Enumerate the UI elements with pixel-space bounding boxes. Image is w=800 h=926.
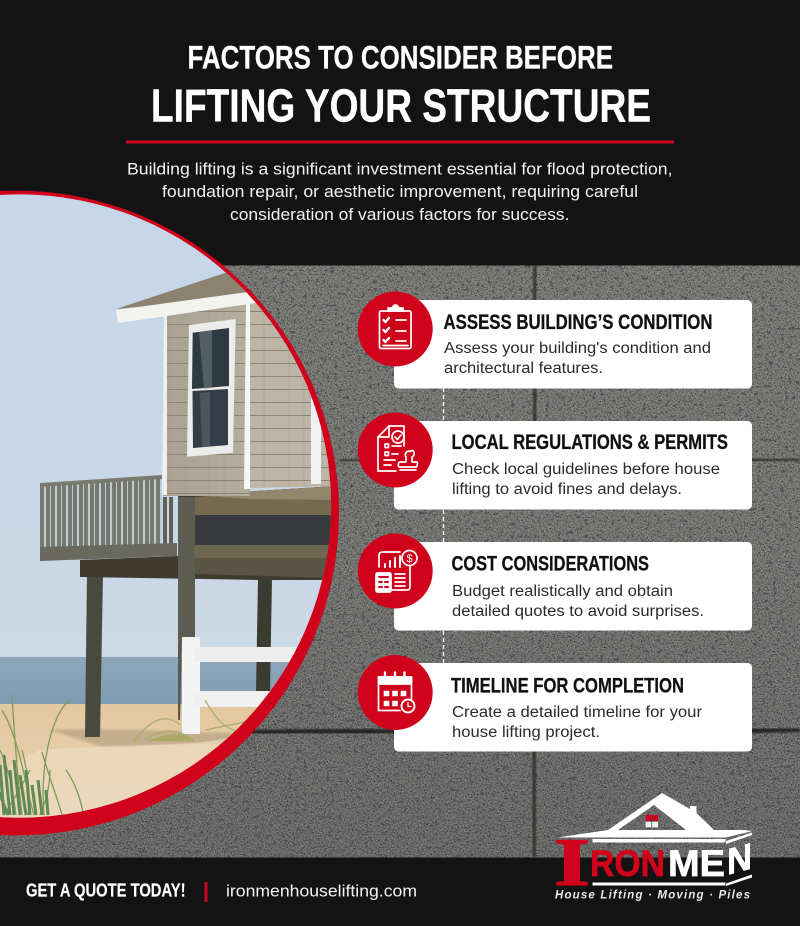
card 4 bbox=[394, 663, 752, 752]
body 1 bbox=[444, 340, 711, 377]
header title bbox=[151, 40, 651, 132]
logo tagline: House Lifting · Moving · Piles bbox=[555, 890, 750, 902]
card 1 bbox=[394, 300, 752, 388]
body 4: Create a detailed timeline for your bbox=[452, 704, 702, 721]
body 1: Assess your building's condition and bbox=[444, 340, 711, 357]
logo letter I: I bbox=[554, 824, 590, 900]
header title: LIFTING YOUR STRUCTURE bbox=[151, 80, 651, 132]
photo: stilt beach house bbox=[0, 194, 332, 818]
icon: permit document with stamp bbox=[378, 426, 417, 471]
photo: posts bbox=[85, 577, 272, 737]
logo roof bbox=[608, 793, 714, 830]
badge 4 bbox=[358, 655, 433, 730]
icon: clipboard checklist bbox=[380, 305, 411, 348]
card 2 bbox=[394, 421, 752, 510]
intro paragraph: Building lifting is a significant investment essential for flood protection, bbox=[127, 160, 672, 178]
footer call to action: GET A QUOTE TODAY! bbox=[26, 880, 186, 900]
photo: dune grass bbox=[0, 695, 245, 816]
logo eaves bbox=[557, 830, 752, 886]
photo: sand bbox=[0, 704, 260, 818]
red crescent behind photo bbox=[0, 191, 339, 835]
dashed connector bbox=[442, 388, 444, 663]
badge 1 bbox=[358, 292, 433, 366]
logo window bbox=[646, 815, 658, 827]
photo: roof bbox=[116, 272, 256, 323]
badge 3 bbox=[358, 534, 433, 608]
header title: FACTORS TO CONSIDER BEFORE bbox=[188, 40, 613, 76]
background: dark header bbox=[0, 0, 800, 266]
header divider bbox=[126, 140, 674, 144]
body 4: house lifting project. bbox=[452, 724, 600, 741]
logo wordmark MEN bbox=[668, 835, 752, 884]
photo: deck railing bbox=[40, 475, 177, 561]
background: concrete block wall bbox=[0, 266, 800, 858]
intro paragraph bbox=[127, 160, 672, 224]
heading 3: COST CONSIDERATIONS bbox=[452, 552, 649, 576]
photo: window bbox=[187, 319, 236, 457]
heading 1: ASSESS BUILDING’S CONDITION bbox=[444, 311, 712, 334]
icon: calendar with clock bbox=[378, 672, 414, 712]
logo wordmark RON: RON bbox=[590, 843, 665, 884]
footer website: ironmenhouselifting.com bbox=[226, 882, 417, 900]
body 3 bbox=[452, 583, 704, 620]
icon: budget calculator bbox=[376, 550, 417, 592]
step 3: cost considerations bbox=[358, 534, 752, 630]
badge 2 bbox=[358, 412, 433, 488]
intro paragraph: foundation repair, or aesthetic improvement, requiring careful bbox=[162, 182, 638, 201]
body 4 bbox=[452, 704, 702, 741]
body 2 bbox=[452, 461, 720, 498]
footer bar bbox=[0, 858, 800, 926]
photo: sea bbox=[0, 657, 292, 707]
heading 2: LOCAL REGULATIONS & PERMITS bbox=[452, 431, 728, 454]
logo wordmark MEN: ME bbox=[668, 843, 725, 884]
icon: budget calculator: $ bbox=[406, 553, 413, 565]
footer divider bbox=[204, 882, 208, 902]
body 1: architectural features. bbox=[444, 360, 603, 377]
body 2: Check local guidelines before house bbox=[452, 461, 720, 478]
heading 4: TIMELINE FOR COMPLETION bbox=[451, 674, 684, 698]
photo: fence bbox=[182, 637, 310, 734]
step 1: assess building condition bbox=[358, 292, 752, 388]
step 4: timeline for completion bbox=[358, 655, 752, 752]
logo wordmark MEN: N bbox=[727, 835, 752, 883]
photo: under-house framing bbox=[80, 486, 335, 642]
body 3: detailed quotes to avoid surprises. bbox=[452, 603, 704, 620]
body 2: lifting to avoid fines and delays. bbox=[452, 481, 682, 498]
photo: house walls bbox=[162, 298, 340, 496]
card 3 bbox=[394, 542, 752, 630]
logo: Iron Men bbox=[554, 793, 752, 902]
body 3: Budget realistically and obtain bbox=[452, 583, 673, 600]
intro paragraph: consideration of various factors for success. bbox=[230, 205, 570, 224]
step 2: local regulations and permits bbox=[358, 412, 752, 510]
